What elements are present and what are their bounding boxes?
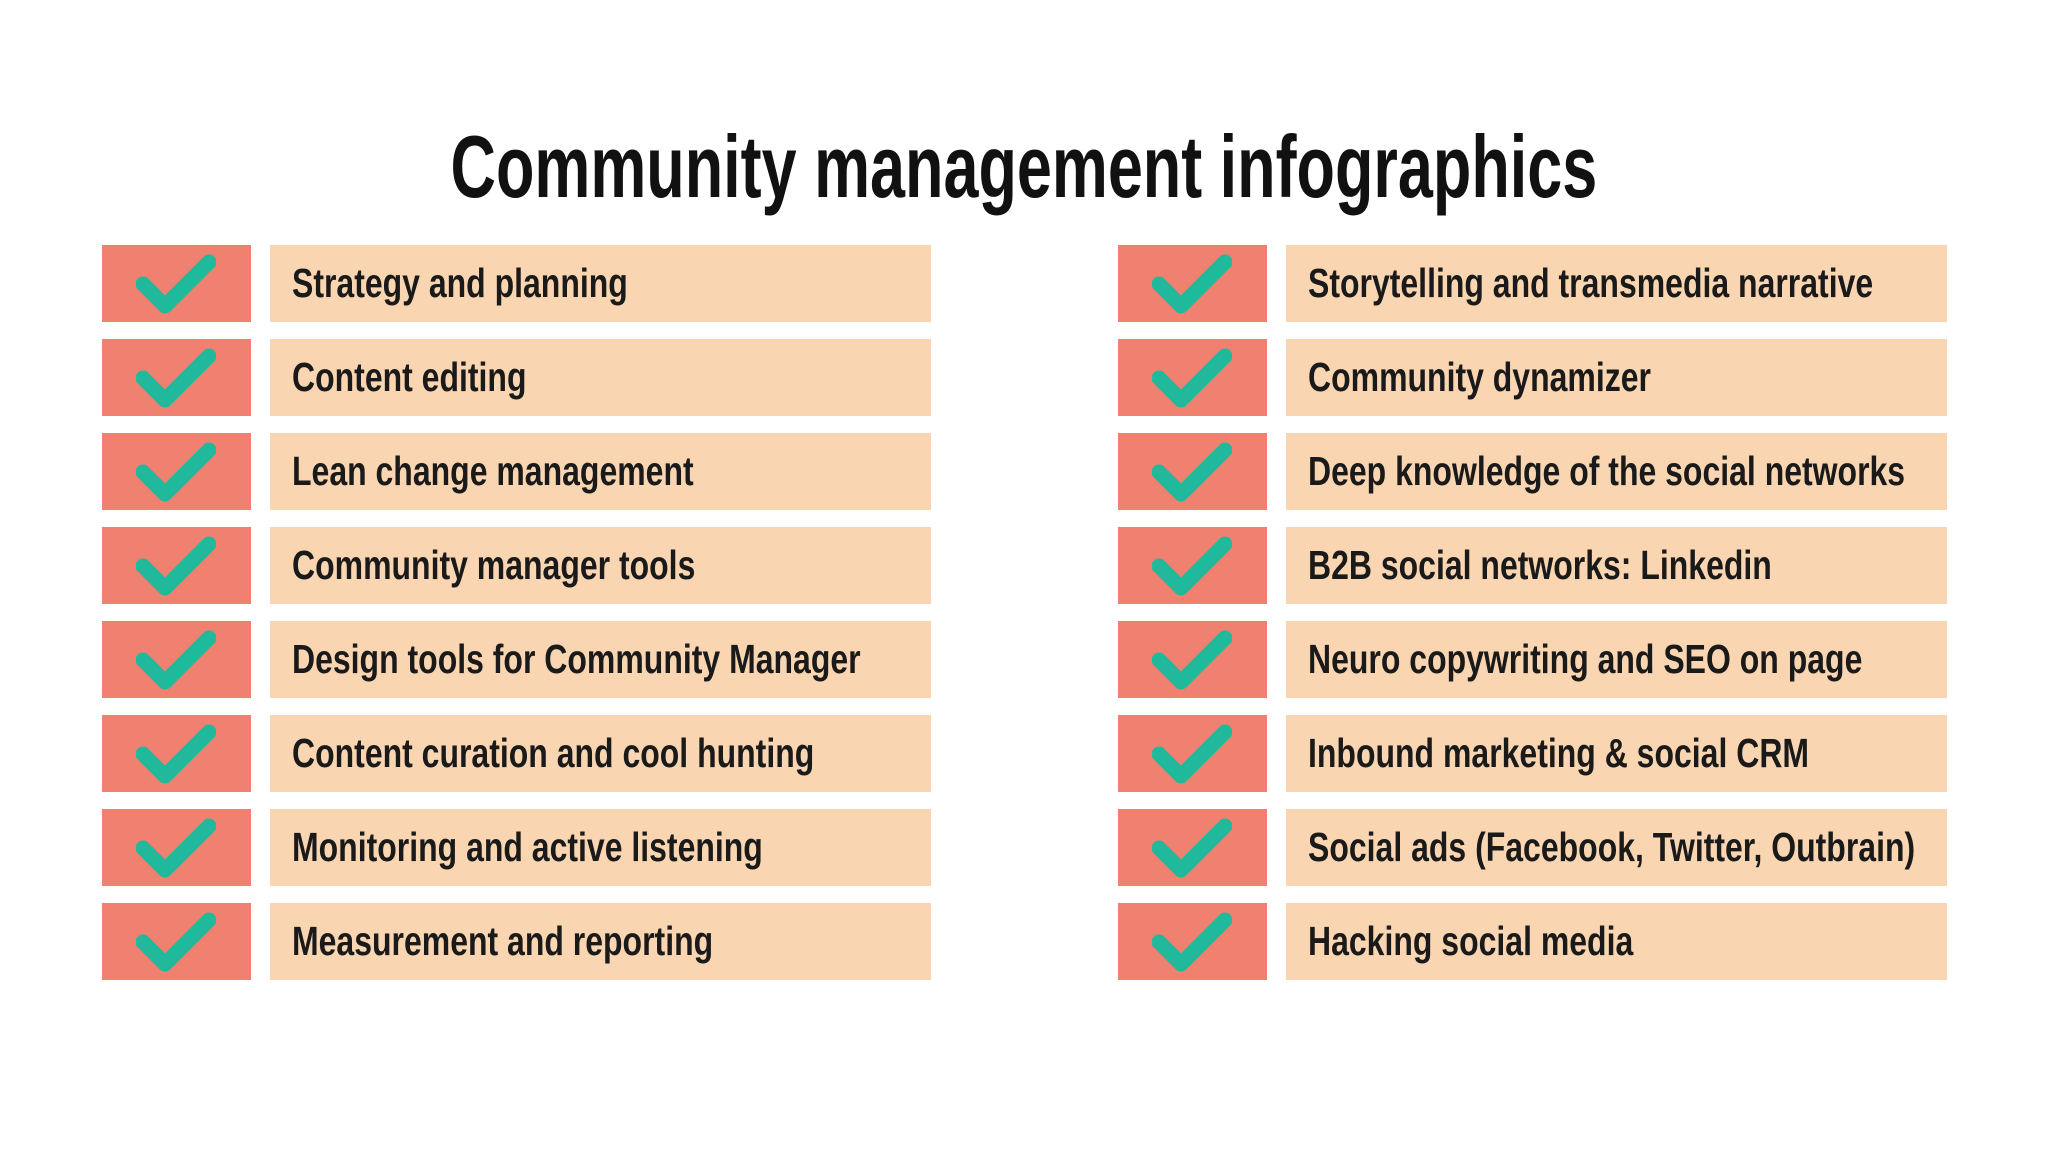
item: Measurement (102, 903, 931, 980)
item: Content editing (102, 339, 931, 416)
item: Community manager tools: Community manager tools (292, 542, 695, 588)
item: Deep knowledge: Deep knowledge of the social networks (1308, 448, 1905, 494)
left list (102, 245, 931, 980)
item: Content curation (102, 715, 931, 792)
item: Strategy and planning: Strategy and planning (292, 260, 628, 306)
item: Monitoring (102, 809, 931, 886)
item: Lean change management (102, 433, 931, 510)
item: Lean change management: Lean change management (292, 448, 694, 494)
item: Social ads: Social ads (Facebook, Twitter, Outbrain) (1308, 824, 1915, 870)
item: Content curation: Content curation and cool hunting (292, 730, 814, 776)
item: Hacking social media (1118, 903, 1947, 980)
item: Social ads (1118, 809, 1947, 886)
item: Inbound marketing (1118, 715, 1947, 792)
item: Strategy and planning (102, 245, 931, 322)
item: Community dynamizer (1118, 339, 1947, 416)
item: Community manager tools (102, 527, 931, 604)
item: B2B: B2B social networks: Linkedin (1308, 542, 1772, 588)
item: B2B (1118, 527, 1947, 604)
item: Storytelling: Storytelling and transmedia narrative (1308, 260, 1873, 306)
item: Content editing: Content editing (292, 354, 526, 400)
item: Neuro copywriting (1118, 621, 1947, 698)
item: Deep knowledge (1118, 433, 1947, 510)
right list (1118, 245, 1947, 980)
item: Measurement: Measurement and reporting (292, 918, 713, 964)
item: Design tools: Design tools for Community Manager (292, 636, 861, 682)
title: Community management infographics (451, 117, 1597, 216)
item: Design tools (102, 621, 931, 698)
item: Monitoring: Monitoring and active listening (292, 824, 763, 870)
item: Hacking social media: Hacking social media (1308, 918, 1633, 964)
item: Neuro copywriting: Neuro copywriting and SEO on page (1308, 636, 1862, 682)
item: Storytelling (1118, 245, 1947, 322)
item: Inbound marketing: Inbound marketing & social CRM (1308, 730, 1809, 776)
item: Community dynamizer: Community dynamizer (1308, 354, 1651, 400)
